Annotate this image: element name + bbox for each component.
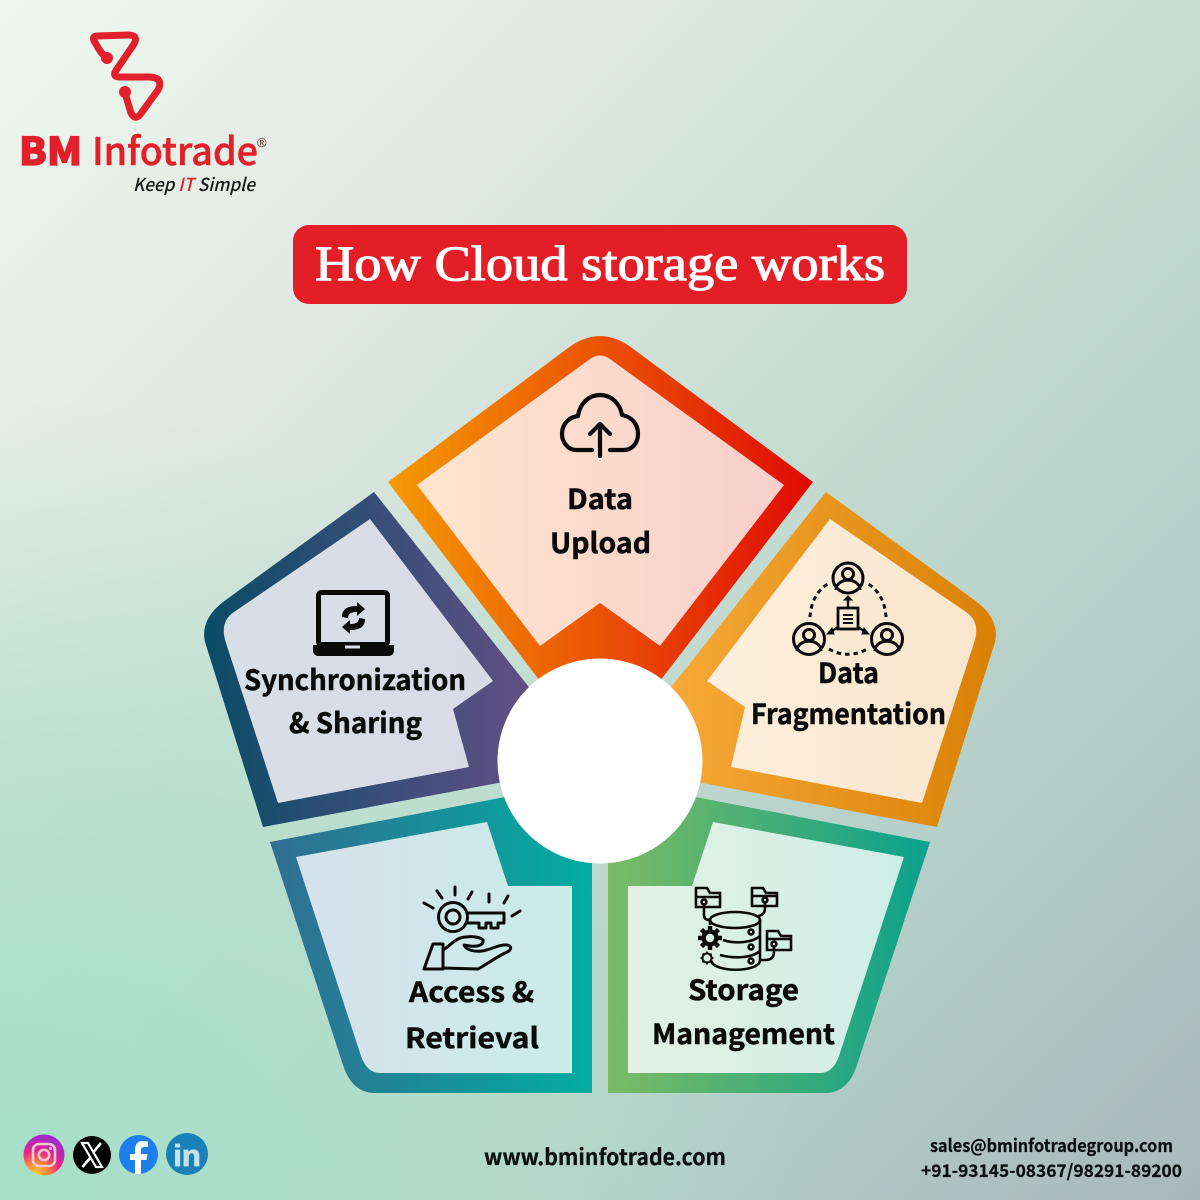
icon: linkedin — [166, 1133, 208, 1175]
icon: facebook — [119, 1135, 158, 1174]
panel fill — [707, 519, 976, 803]
contact details: sales@bminfotradegroup.com — [930, 1133, 1173, 1158]
panel frame — [650, 492, 996, 827]
panel frame — [608, 796, 930, 1093]
icon: X — [73, 1136, 111, 1174]
website: www.bminfotrade.com — [484, 1140, 726, 1172]
icon: laptop sync — [313, 592, 394, 656]
label: Access & — [408, 971, 534, 1011]
registered mark: ® — [257, 135, 267, 150]
label — [244, 659, 466, 742]
title banner — [293, 225, 907, 304]
label — [405, 971, 539, 1057]
label — [652, 969, 835, 1053]
panel frame — [388, 336, 813, 760]
icon: cloud upload — [562, 395, 638, 456]
logo tagline: Keep IT Simple — [133, 171, 257, 197]
label: Upload — [550, 522, 651, 562]
icon part: small gear — [700, 952, 714, 964]
contact details — [921, 1133, 1182, 1183]
panel: Data Upload — [388, 336, 813, 760]
label: & Sharing — [289, 702, 422, 742]
center circle — [498, 658, 702, 864]
panel frame — [204, 492, 550, 827]
panel fill — [296, 822, 572, 1073]
logo: BM Infotrade — [19, 35, 267, 197]
label: Data — [567, 478, 633, 518]
panel: Access & Retrieval — [270, 796, 592, 1093]
icon part: large gear — [698, 926, 722, 950]
panel fill — [417, 356, 784, 646]
label — [550, 478, 651, 562]
label: Fragmentation — [751, 693, 946, 733]
label: Management — [652, 1013, 835, 1053]
contact details: +91-93145-08367/98291-89200 — [921, 1158, 1182, 1183]
label: Retrieval — [405, 1017, 539, 1057]
label: Synchronization — [244, 659, 466, 699]
panel: Data Fragmentation — [650, 492, 996, 827]
logo wordmark: BM — [19, 121, 82, 176]
logo mark — [93, 35, 160, 117]
icon: database with folders — [696, 888, 791, 970]
panel frame — [270, 796, 592, 1093]
panel: Storage Management — [608, 796, 930, 1093]
label — [751, 652, 946, 733]
icon: instagram — [24, 1134, 64, 1176]
panel: Synchronization & Sharing — [204, 492, 550, 827]
icon: linkedin: in — [173, 1138, 201, 1173]
panel fill — [628, 822, 904, 1073]
label: Storage — [688, 969, 799, 1009]
icon: key in hand — [424, 887, 520, 969]
title banner: How Cloud storage works — [315, 235, 885, 291]
social icons — [24, 1133, 208, 1176]
panel fill — [224, 519, 493, 803]
logo wordmark: Infotrade — [92, 121, 258, 176]
label: Data — [818, 652, 879, 692]
icon: shared document network — [794, 563, 902, 654]
